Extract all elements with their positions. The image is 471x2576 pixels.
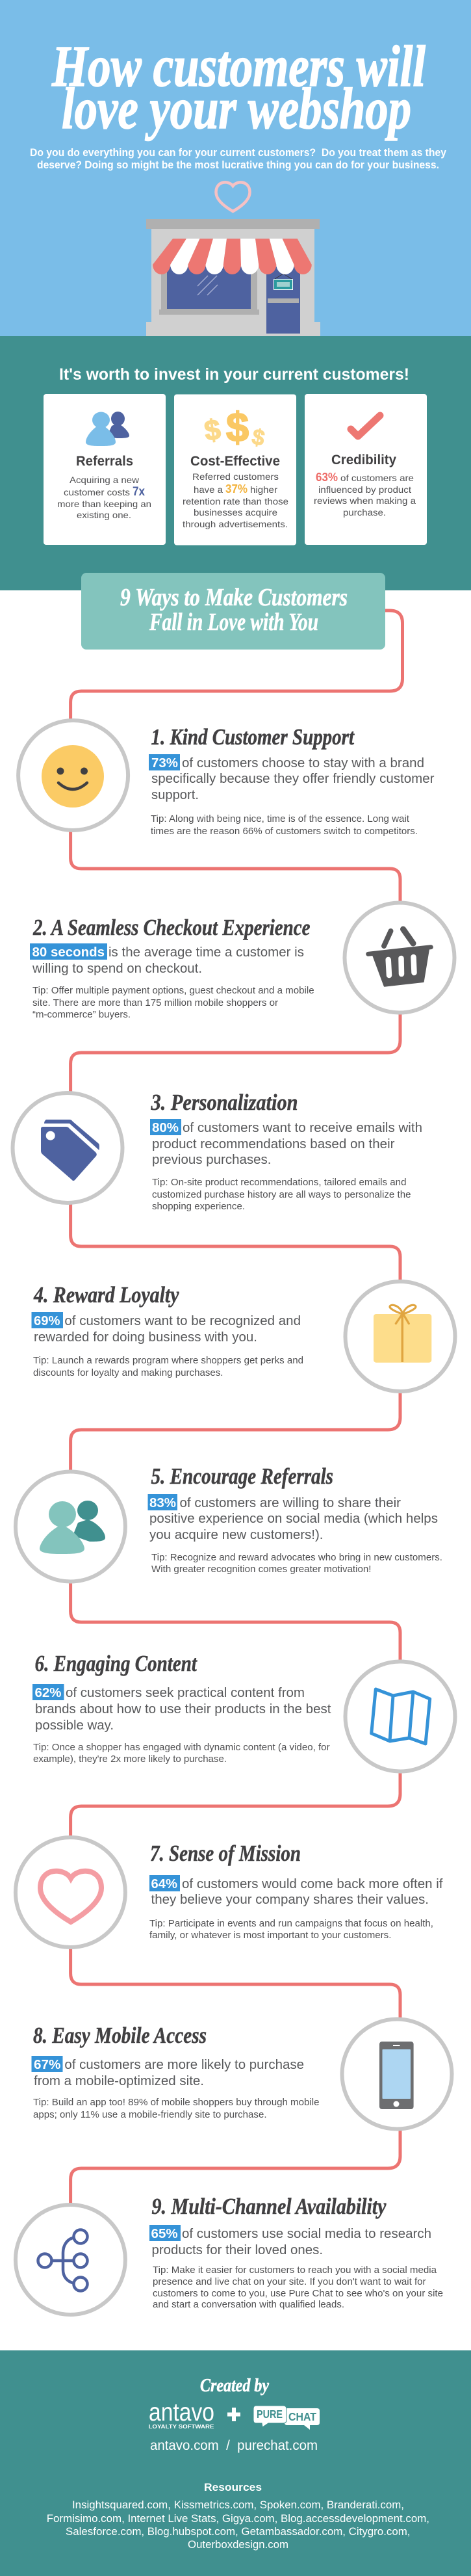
card: cost-effective: higher (250, 484, 277, 495)
card: credibility: purchase. (343, 507, 386, 518)
connector line (71, 611, 402, 2211)
stat highlight: 80% (152, 1120, 179, 1135)
header panel (0, 0, 471, 336)
logo: antavo: LOYALTY SOFTWARE (148, 2423, 214, 2430)
item 1: kind customer support: times are the reason 66% of customers switch to competitors. (151, 826, 418, 837)
item 1: kind customer support: specifically because they offer friendly customer (151, 771, 435, 786)
resources heading: Resources (204, 2481, 262, 2493)
card: cost-effective: 37% (225, 482, 248, 495)
item 8: easy mobile access: apps; only 11% use a mobile-friendly site to purchase. (33, 2110, 266, 2120)
card: referrals: customer costs (64, 487, 130, 497)
website links: antavo.com / purechat.com (150, 2438, 318, 2453)
item 2: seamless checkout: Tip: Offer multiple payment options, guest checkout and a mobile (32, 986, 314, 996)
card: referrals: 7x (133, 485, 145, 499)
logo: antavo: antavo (149, 2399, 214, 2426)
card: credibility: Credibility (331, 453, 396, 467)
icon: dollar signs: $ (203, 414, 223, 447)
item 2: seamless checkout: site. There are more than 175 million mobile shoppers or (32, 998, 278, 1008)
icon: two people (86, 412, 129, 446)
intro text (30, 147, 447, 171)
resources list: Insightsquared.com, Kissmetrics.com, Spoken.com, Branderati.com, (72, 2499, 404, 2511)
item 9: multi-channel availability: Tip: Make it easier for customers to reach you with a social media (153, 2265, 437, 2276)
card: cost-effective: businesses acquire (194, 507, 277, 518)
item 3: personalization: shopping experience. (152, 1202, 245, 1212)
card: cost-effective: retention rate than those (183, 496, 288, 506)
icon: network in circle (16, 2205, 125, 2315)
card: cost-effective: through advertisements. (183, 519, 288, 529)
item 7: sense of mission: family, or whatever is most important to your customers. (149, 1930, 391, 1941)
stat highlight: 80 seconds (32, 945, 105, 960)
logo: pure chat (253, 2406, 320, 2430)
logo: pure chat: PURE (257, 2408, 283, 2421)
item 6: engaging content: of customers seek practical content from (66, 1685, 305, 1700)
intro text: deserve? Doing so might be the most lucrative thing you can do for your business. (37, 159, 439, 171)
resources list (47, 2499, 429, 2551)
item 5: encourage referrals: positive experience on social media (which helps (149, 1511, 438, 1526)
created by heading: Created by (200, 2375, 269, 2396)
item 8: easy mobile access: from a mobile-optimized site. (34, 2073, 204, 2088)
item 6: engaging content: 6. Engaging Content (35, 1651, 197, 1676)
item 5: encourage referrals: With greater recognition comes greater motivation! (151, 1564, 372, 1575)
item 6: engaging content: brands about how to use their products in the best (35, 1702, 331, 1716)
card: cost-effective: Referred customers (192, 471, 279, 482)
card: credibility: influenced by product (318, 484, 411, 495)
item 3: personalization: of customers want to receive emails with (183, 1120, 422, 1135)
card: credibility: of customers are (340, 473, 414, 483)
item 6: engaging content: example), they're 2x more likely to purchase. (33, 1754, 227, 1765)
item 7: sense of mission: Tip: Participate in events and run campaigns that focus on health, (149, 1919, 433, 1929)
icon: smiley in circle (18, 720, 128, 830)
icon: phone in circle (342, 2019, 452, 2129)
item 3: personalization (13, 1090, 422, 1212)
item 8: easy mobile access: of customers are more likely to purchase (64, 2057, 304, 2072)
plus sign (227, 2408, 240, 2421)
item 9: multi-channel availability: and start a conversation with qualified leads. (153, 2300, 344, 2310)
icon: map in circle (346, 1662, 455, 1771)
card: cost-effective: have a (194, 484, 223, 495)
card: referrals: Acquiring a new (70, 475, 140, 485)
item 5: encourage referrals: of customers are willing to share their (179, 1495, 401, 1510)
item 9: multi-channel availability: products for their loved ones. (152, 2242, 323, 2257)
footer panel (0, 2350, 471, 2576)
item 3: personalization: customized purchase history are all ways to personalize the (152, 1190, 411, 1200)
item 1: kind customer support: Tip: Along with being nice, time is of the essence. Long wait (151, 814, 409, 824)
stat highlight: 73% (151, 756, 178, 770)
item 1: kind customer support: support. (151, 787, 199, 802)
banner: 9 ways: Fall in Love with You (149, 609, 318, 636)
icon: people in circle (16, 1472, 125, 1581)
icon: heart above store (216, 182, 250, 211)
item 6: engaging content: Tip: Once a shopper has engaged with dynamic content (a video, for (33, 1742, 330, 1753)
icon: dollar signs: $ (249, 425, 267, 451)
item 4: reward loyalty: discounts for loyalty and making purchases. (33, 1368, 223, 1378)
panel: why invest (0, 336, 471, 590)
stat highlight: 69% (34, 1313, 60, 1328)
section heading: It's worth to invest in your current customers! (59, 365, 409, 384)
banner: 9 ways: 9 Ways to Make Customers (120, 584, 348, 611)
item 5: encourage referrals: you acquire new customers!). (149, 1527, 324, 1542)
icon: dollar signs: $ (226, 405, 249, 451)
item 4: reward loyalty: rewarded for doing business with you. (34, 1330, 257, 1345)
item 8: easy mobile access: Tip: Build an app too! 89% of mobile shoppers buy through mobile (33, 2097, 320, 2108)
intro text: Do you do everything you can for your current customers? Do you treat them as they (30, 147, 447, 159)
item 2: seamless checkout: willing to spend on checkout. (32, 961, 202, 976)
item 3: personalization: 3. Personalization (151, 1090, 298, 1115)
stat highlight: 67% (34, 2057, 60, 2072)
item 7: sense of mission: of customers would come back more often if (182, 1876, 443, 1891)
item 7: sense of mission (16, 1837, 443, 1947)
item 5: encourage referrals: Tip: Recognize and reward advocates who bring in new customers. (151, 1553, 442, 1563)
item 4: reward loyalty: Tip: Launch a rewards program where shoppers get perks and (33, 1356, 303, 1366)
item 3: personalization: previous purchases. (152, 1152, 272, 1167)
title (51, 34, 426, 141)
item 9: multi-channel availability (16, 2194, 443, 2315)
item 2: seamless checkout (30, 902, 455, 1020)
stat highlight: 65% (151, 2226, 178, 2241)
item 1: kind customer support: 1. Kind Customer Support (151, 724, 355, 750)
item 7: sense of mission: they believe your company shares their values. (151, 1892, 429, 1907)
icon: basket in circle (344, 902, 455, 1013)
icon: check mark (351, 415, 380, 436)
item 6: engaging content: possible way. (35, 1718, 114, 1733)
card: credibility: reviews when making a (314, 495, 416, 506)
resources list: Outerboxdesign.com (188, 2538, 288, 2551)
item 2: seamless checkout: is the average time a customer is (108, 945, 304, 960)
awning (153, 239, 312, 274)
item 3: personalization: product recommendations based on their (152, 1137, 395, 1151)
card: credibility (305, 394, 427, 545)
icon: storefront (146, 219, 320, 336)
item 9: multi-channel availability: customers to come to you, use Pure Chat to see who's on your site (153, 2289, 443, 2299)
card: referrals (44, 394, 166, 545)
item 9: multi-channel availability: 9. Multi-Channel Availability (152, 2194, 387, 2219)
item 4: reward loyalty (31, 1281, 455, 1391)
icon: price tag in circle (13, 1093, 122, 1203)
stat highlight: 62% (35, 1685, 61, 1700)
icon: dollar signs (203, 405, 267, 451)
card: referrals: Referrals (76, 454, 133, 469)
card: cost-effective: Cost-Effective (190, 454, 280, 469)
card: cost-effective (174, 394, 296, 545)
card: referrals: existing one. (77, 510, 131, 520)
card: referrals: more than keeping an (57, 499, 151, 509)
item 5: encourage referrals: 5. Encourage Referrals (151, 1464, 333, 1489)
item 8: easy mobile access (31, 2019, 452, 2129)
icon: heart in circle (16, 1837, 125, 1947)
item 5: encourage referrals (16, 1464, 442, 1581)
stat highlight: 64% (151, 1876, 177, 1891)
item 4: reward loyalty: of customers want to be recognized and (64, 1313, 301, 1328)
banner: 9 ways (81, 573, 385, 650)
item 9: multi-channel availability: presence and live chat on your site. If you don't want to wait for (153, 2277, 426, 2287)
resources list: Salesforce.com, Blog.hubspot.com, Getambassador.com, Citygro.com, (66, 2525, 411, 2538)
item 2: seamless checkout: “m-commerce” buyers. (32, 1010, 131, 1020)
item 3: personalization: Tip: On-site product recommendations, tailored emails and (152, 1177, 407, 1188)
item 9: multi-channel availability: of customers use social media to research (182, 2226, 431, 2241)
item 4: reward loyalty: 4. Reward Loyalty (33, 1282, 179, 1308)
item 7: sense of mission: 7. Sense of Mission (150, 1841, 301, 1866)
item 8: easy mobile access: 8. Easy Mobile Access (33, 2023, 207, 2048)
item 1: kind customer support: of customers choose to stay with a brand (182, 756, 424, 770)
item 2: seamless checkout: 2. A Seamless Checkout Experience (32, 915, 311, 940)
resources list: Formisimo.com, Internet Live Stats, Gigya.com, Blog.accessdevelopment.com, (47, 2512, 429, 2525)
item 6: engaging content (32, 1651, 455, 1771)
logo: pure chat: CHAT (288, 2410, 316, 2423)
stat highlight: 83% (149, 1495, 176, 1510)
item 1: kind customer support (18, 720, 435, 837)
icon: gift in circle (346, 1281, 455, 1391)
card: credibility: 63% (316, 471, 338, 484)
